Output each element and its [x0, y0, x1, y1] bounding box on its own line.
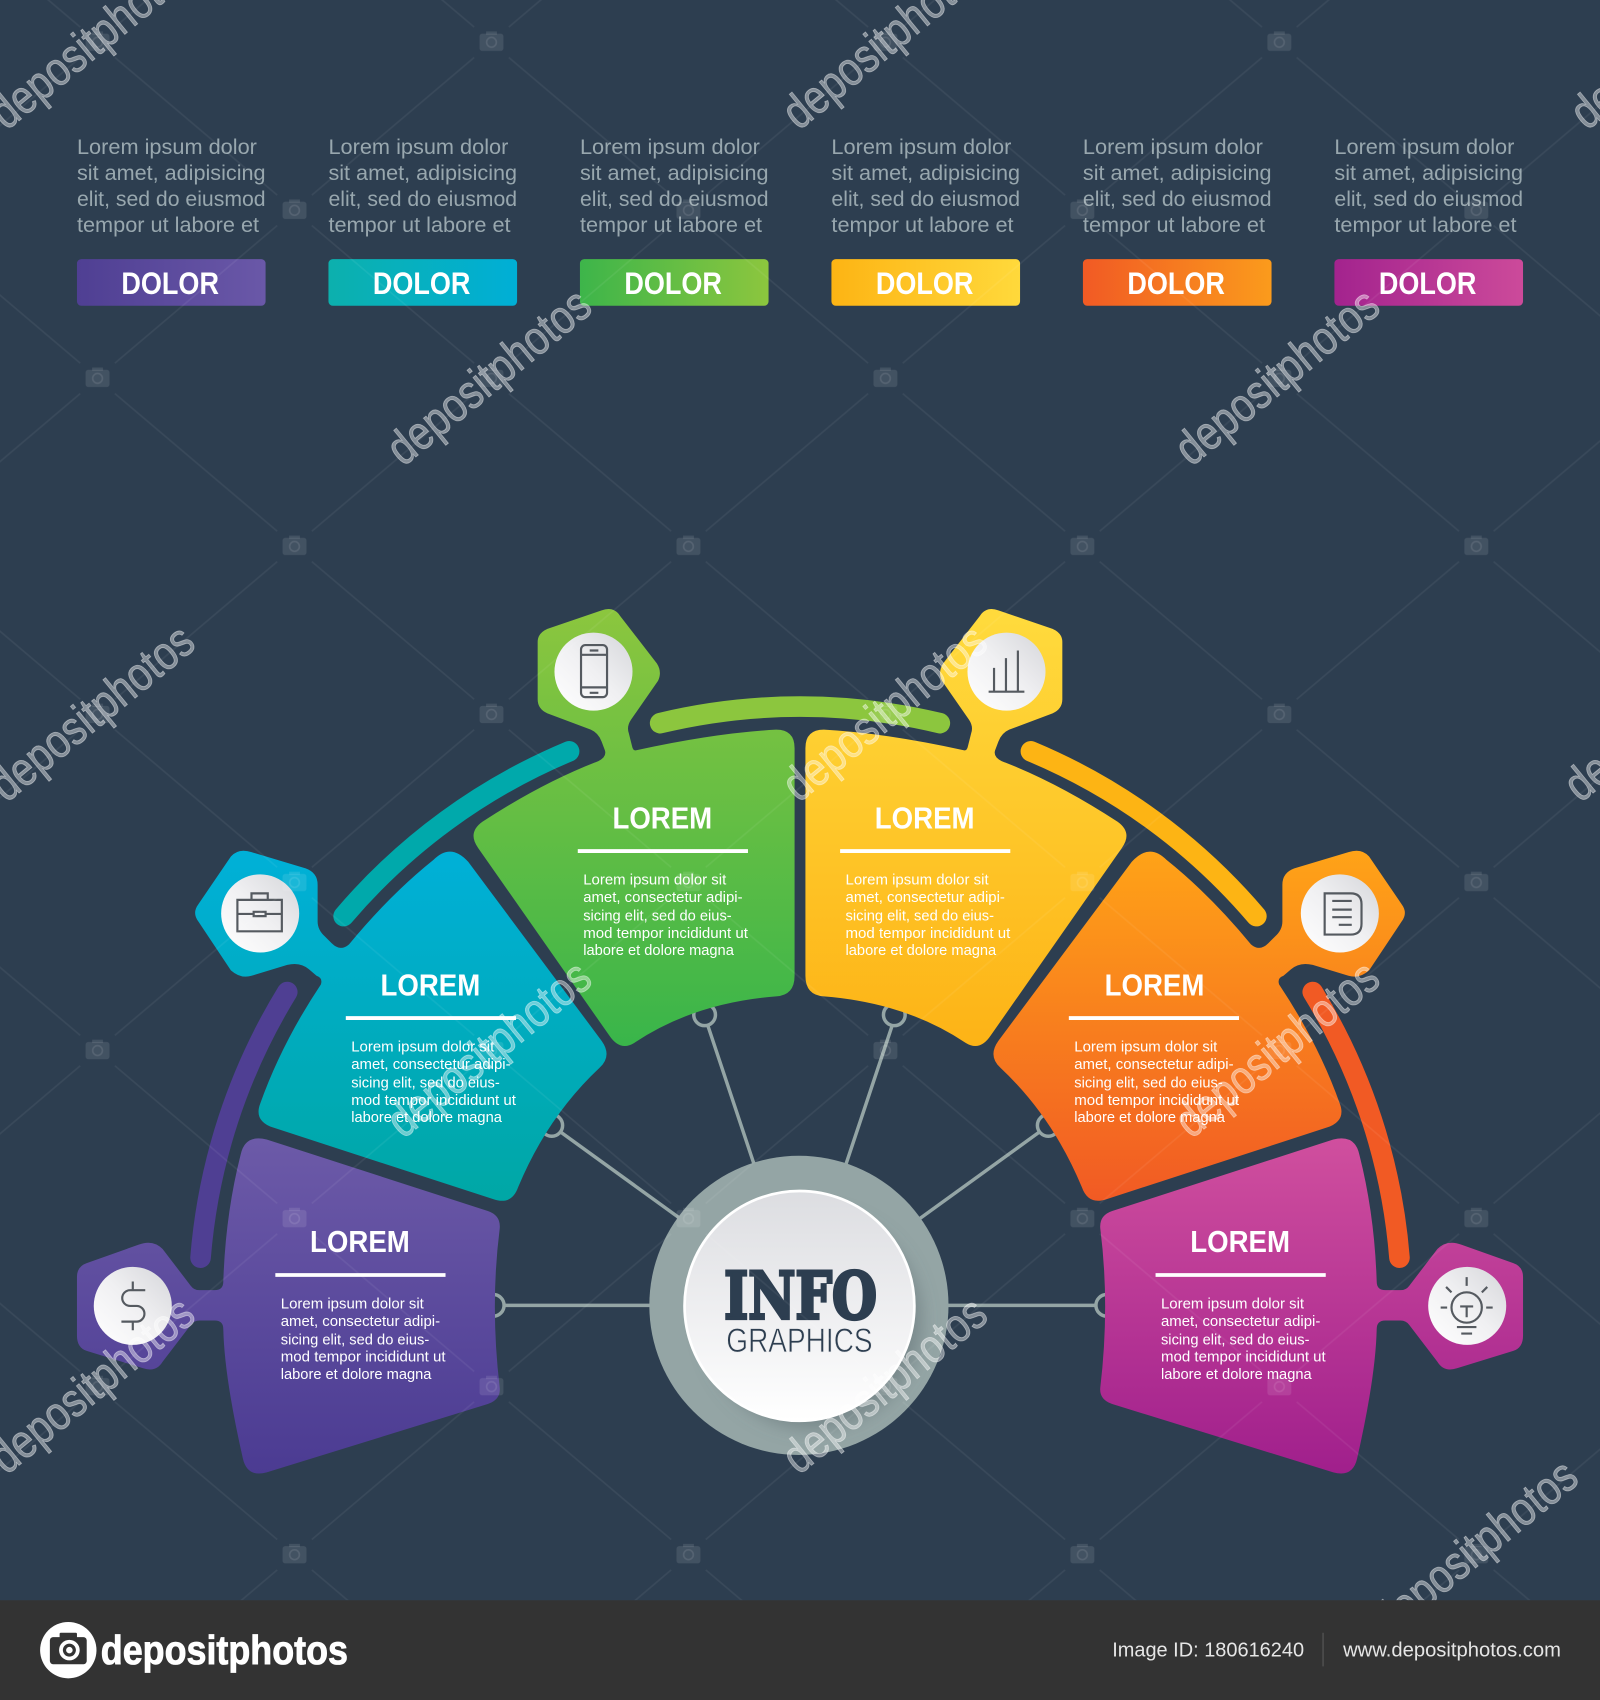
- column 6: description and label: elit, sed do eiusmod: [1334, 186, 1523, 211]
- column 2: description and label: tempor ut labore et: [328, 212, 511, 237]
- icon: dollar: [94, 1267, 172, 1345]
- panel: yellow segment: Lorem ipsum dolor sit: [846, 873, 989, 889]
- panel: teal segment: sicing elit, sed do eius-: [351, 1075, 500, 1091]
- column 2: description and label: Lorem ipsum dolor: [328, 134, 508, 159]
- column 5: description and label: sit amet, adipisicing: [1083, 160, 1272, 185]
- column 1: description and label: sit amet, adipisicing: [77, 160, 266, 185]
- panel: green segment: amet, consectetur adipi-: [583, 890, 743, 906]
- icon: light bulb: [1428, 1267, 1506, 1345]
- panel: purple segment: [77, 1138, 500, 1473]
- column 6: description and label: [1334, 134, 1523, 306]
- panel: green segment: mod tempor incididunt ut: [583, 926, 748, 942]
- panel: pink segment: Lorem ipsum dolor sit: [1161, 1297, 1304, 1313]
- panel: purple segment: Lorem ipsum dolor sit: [281, 1297, 424, 1313]
- column 5: description and label: elit, sed do eiusmod: [1083, 186, 1272, 211]
- panel: purple segment: labore et dolore magna: [281, 1367, 432, 1383]
- column 2: description and label: DOLOR: [373, 266, 471, 301]
- panel: purple segment: sicing elit, sed do eius-: [281, 1332, 429, 1348]
- panel: orange segment: Lorem ipsum dolor sit: [1074, 1040, 1217, 1056]
- watermark text: depositphotos: [377, 278, 601, 476]
- connector lines and rings: [482, 1004, 1118, 1316]
- watermark text: depositphotos: [377, 950, 601, 1148]
- column 6: description and label: sit amet, adipisicing: [1334, 160, 1523, 185]
- panel: orange segment: [993, 851, 1405, 1201]
- column 3: description and label: Lorem ipsum dolor: [580, 134, 760, 159]
- panel: teal segment: Lorem ipsum dolor sit: [351, 1040, 494, 1056]
- panel: yellow segment: sicing elit, sed do eius-: [846, 908, 994, 924]
- column 2: description and label: [328, 134, 517, 306]
- center hub: INFO: [724, 1258, 877, 1334]
- panel: pink segment: labore et dolore magna: [1161, 1367, 1313, 1383]
- column 4: description and label: tempor ut labore et: [831, 212, 1014, 237]
- column 4: description and label: DOLOR: [876, 266, 974, 301]
- column 2: description and label: sit amet, adipisicing: [328, 160, 517, 185]
- column 4: description and label: sit amet, adipisicing: [831, 160, 1020, 185]
- footer bar: Image ID: 180616240: [1112, 1640, 1304, 1662]
- column 6: description and label: Lorem ipsum dolor: [1334, 134, 1514, 159]
- watermark text: depositphotos: [1165, 278, 1390, 476]
- icon: briefcase: [221, 874, 299, 952]
- watermark text: depositphotos: [772, 614, 997, 812]
- panel: pink segment: amet, consectetur adipi-: [1161, 1314, 1320, 1330]
- footer bar: [0, 1600, 1600, 1700]
- panel: green segment: LOREM: [612, 802, 712, 835]
- icon: document: [1301, 874, 1379, 952]
- icon: phone: [554, 633, 633, 711]
- panel: pink segment: LOREM: [1190, 1226, 1290, 1259]
- column 3: description and label: DOLOR: [624, 266, 722, 301]
- panel: teal segment: LOREM: [380, 969, 480, 1002]
- column 5: description and label: tempor ut labore et: [1083, 212, 1265, 237]
- panel: orange segment: amet, consectetur adipi-: [1074, 1057, 1234, 1073]
- column 1: description and label: tempor ut labore et: [77, 212, 259, 237]
- panel: orange segment: sicing elit, sed do eius-: [1074, 1075, 1223, 1091]
- panel: teal segment: [195, 851, 607, 1201]
- panel: orange segment: LOREM: [1105, 969, 1204, 1002]
- center hub: [649, 1156, 949, 1455]
- logo camera icon: [40, 1622, 96, 1678]
- center hub: GRAPHICS: [726, 1322, 873, 1360]
- icon: bar chart: [967, 633, 1046, 711]
- panel: purple segment: amet, consectetur adipi-: [281, 1314, 440, 1330]
- watermark text: depositphotos: [1165, 950, 1390, 1148]
- panel: yellow segment: amet, consectetur adipi-: [846, 890, 1005, 906]
- footer bar: www.depositphotos.com: [1342, 1640, 1561, 1662]
- panel: yellow segment: [805, 609, 1126, 1046]
- footer bar: depositphotos: [101, 1627, 348, 1673]
- column 4: description and label: elit, sed do eiusmod: [831, 186, 1020, 211]
- column 3: description and label: elit, sed do eiusmod: [580, 186, 769, 211]
- panel: pink segment: [1100, 1138, 1523, 1473]
- panel: yellow segment: labore et dolore magna: [846, 943, 997, 959]
- watermark text: depositphotos: [772, 1287, 997, 1484]
- column 2: description and label: elit, sed do eiusmod: [328, 186, 517, 211]
- panel: orange segment: mod tempor incididunt ut: [1074, 1093, 1239, 1109]
- column 1: description and label: [77, 134, 266, 306]
- outer arcs: [201, 707, 1399, 1258]
- panel: green segment: [474, 609, 795, 1046]
- column 3: description and label: [580, 134, 769, 306]
- column 5: description and label: DOLOR: [1127, 266, 1225, 301]
- column 6: description and label: DOLOR: [1379, 266, 1477, 301]
- panel: purple segment: mod tempor incididunt ut: [281, 1350, 446, 1366]
- panel: pink segment: sicing elit, sed do eius-: [1161, 1332, 1310, 1348]
- panel: green segment: Lorem ipsum dolor sit: [583, 873, 726, 889]
- column 4: description and label: Lorem ipsum dolor: [831, 134, 1011, 159]
- column 1: description and label: DOLOR: [121, 266, 219, 301]
- panel: yellow segment: mod tempor incididunt ut: [846, 926, 1010, 942]
- panel: purple segment: LOREM: [310, 1226, 410, 1259]
- column 6: description and label: tempor ut labore et: [1334, 212, 1517, 237]
- column 1: description and label: Lorem ipsum dolor: [77, 134, 257, 159]
- panel: teal segment: mod tempor incididunt ut: [351, 1093, 516, 1109]
- column 5: description and label: Lorem ipsum dolor: [1083, 134, 1263, 159]
- panel: pink segment: mod tempor incididunt ut: [1161, 1350, 1326, 1366]
- panel: green segment: labore et dolore magna: [583, 943, 735, 959]
- panel: orange segment: labore et dolore magna: [1074, 1110, 1226, 1126]
- panel: yellow segment: LOREM: [875, 802, 975, 835]
- column 3: description and label: tempor ut labore et: [580, 212, 762, 237]
- panel: teal segment: amet, consectetur adipi-: [351, 1057, 511, 1073]
- column 1: description and label: elit, sed do eiusmod: [77, 186, 266, 211]
- column 3: description and label: sit amet, adipisicing: [580, 160, 769, 185]
- column 4: description and label: [831, 134, 1020, 306]
- column 5: description and label: [1083, 134, 1272, 306]
- panel: green segment: sicing elit, sed do eius-: [583, 908, 732, 924]
- panel: teal segment: labore et dolore magna: [351, 1110, 503, 1126]
